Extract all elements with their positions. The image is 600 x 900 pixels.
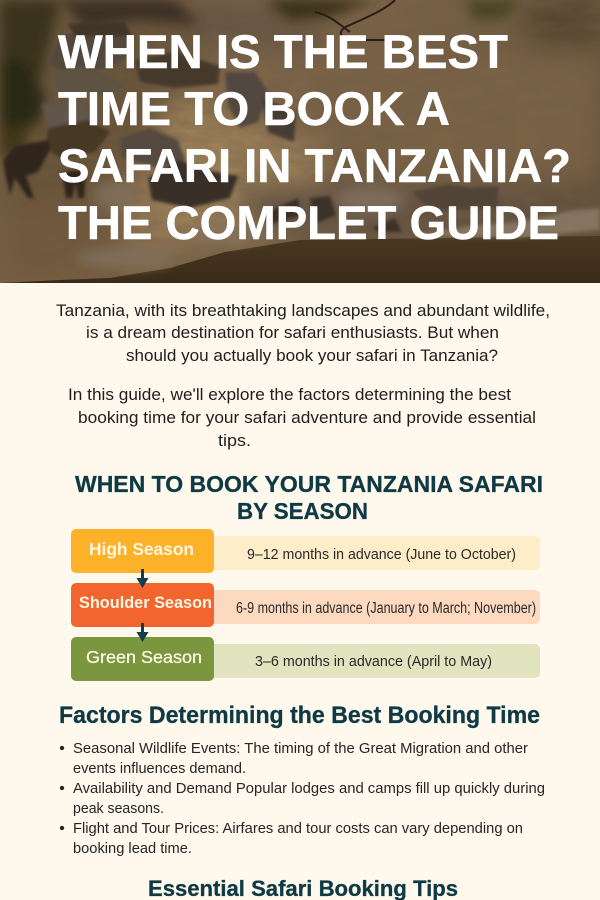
dark tree branch (315, 0, 395, 40)
foliage (0, 0, 520, 155)
wildebeest (3, 22, 498, 232)
row: high season: High Season (89, 539, 194, 559)
bullet: flight and tour prices: Flight and Tour Prices: Airfares and tour costs can vary depending on (73, 821, 523, 837)
hero title: THE COMPLET GUIDE (58, 197, 559, 250)
intro paragraph 1 (56, 301, 550, 365)
intro paragraph 1: should you actually book your safari in Tanzania? (126, 346, 498, 365)
section heading: factors: Factors Determining the Best Booking Time (59, 702, 540, 729)
intro paragraph 2: In this guide, we'll explore the factors determining the best (68, 385, 511, 404)
river (0, 236, 600, 283)
intro paragraph 1: is a dream destination for safari enthusiasts. But when (86, 323, 499, 342)
intro paragraph 2: tips. (218, 431, 251, 450)
row: green season (71, 637, 540, 681)
hero title: WHEN IS THE BEST (58, 26, 508, 79)
section heading: when to book: BY SEASON (237, 498, 368, 524)
row: high season (71, 529, 540, 573)
darkening overlay (0, 0, 600, 283)
intro paragraph 2 (68, 385, 536, 450)
hero title (58, 26, 571, 250)
bullet list: factors (60, 741, 545, 857)
row: shoulder season: Shoulder Season (79, 593, 212, 612)
bullet: availability and demand: peak seasons. (73, 801, 164, 817)
arrow: shoulder to green (136, 623, 148, 642)
splash and dust (410, 208, 600, 238)
intro paragraph 2: booking time for your safari adventure and provide essential (78, 408, 536, 427)
intro paragraph 1: Tanzania, with its breathtaking landscapes and abundant wildlife, (56, 301, 550, 320)
bullet: availability and demand: Availability and Demand Popular lodges and camps fill up quickly during (73, 781, 545, 797)
bullet: seasonal wildlife events: events influences demand. (73, 761, 246, 777)
bank texture (136, 25, 600, 242)
section heading: when to book (75, 471, 543, 524)
row: shoulder season (71, 583, 540, 627)
section heading: when to book: WHEN TO BOOK YOUR TANZANIA SAFARI (75, 471, 543, 497)
row: high season: 9–12 months in advance (June to October) (247, 546, 516, 563)
arrow: high to shoulder (136, 569, 148, 588)
row: green season: Green Season (86, 647, 202, 667)
bullet: seasonal wildlife events: Seasonal Wildlife Events: The timing of the Great Migration and other (73, 741, 528, 757)
bullet: seasonal wildlife events (60, 741, 528, 777)
bullet: flight and tour prices (60, 821, 523, 857)
row: green season: 3–6 months in advance (April to May) (255, 653, 492, 670)
hero title: SAFARI IN TANZANIA? (58, 140, 571, 193)
hero title: TIME TO BOOK A (58, 83, 450, 136)
season chart (71, 529, 540, 681)
bullet: availability and demand (60, 781, 545, 817)
bullet: flight and tour prices: booking lead time. (73, 841, 192, 857)
hero photo: wildebeest crossing the river (0, 0, 600, 283)
row: shoulder season: 6-9 months in advance (January to March; November) (236, 600, 536, 617)
